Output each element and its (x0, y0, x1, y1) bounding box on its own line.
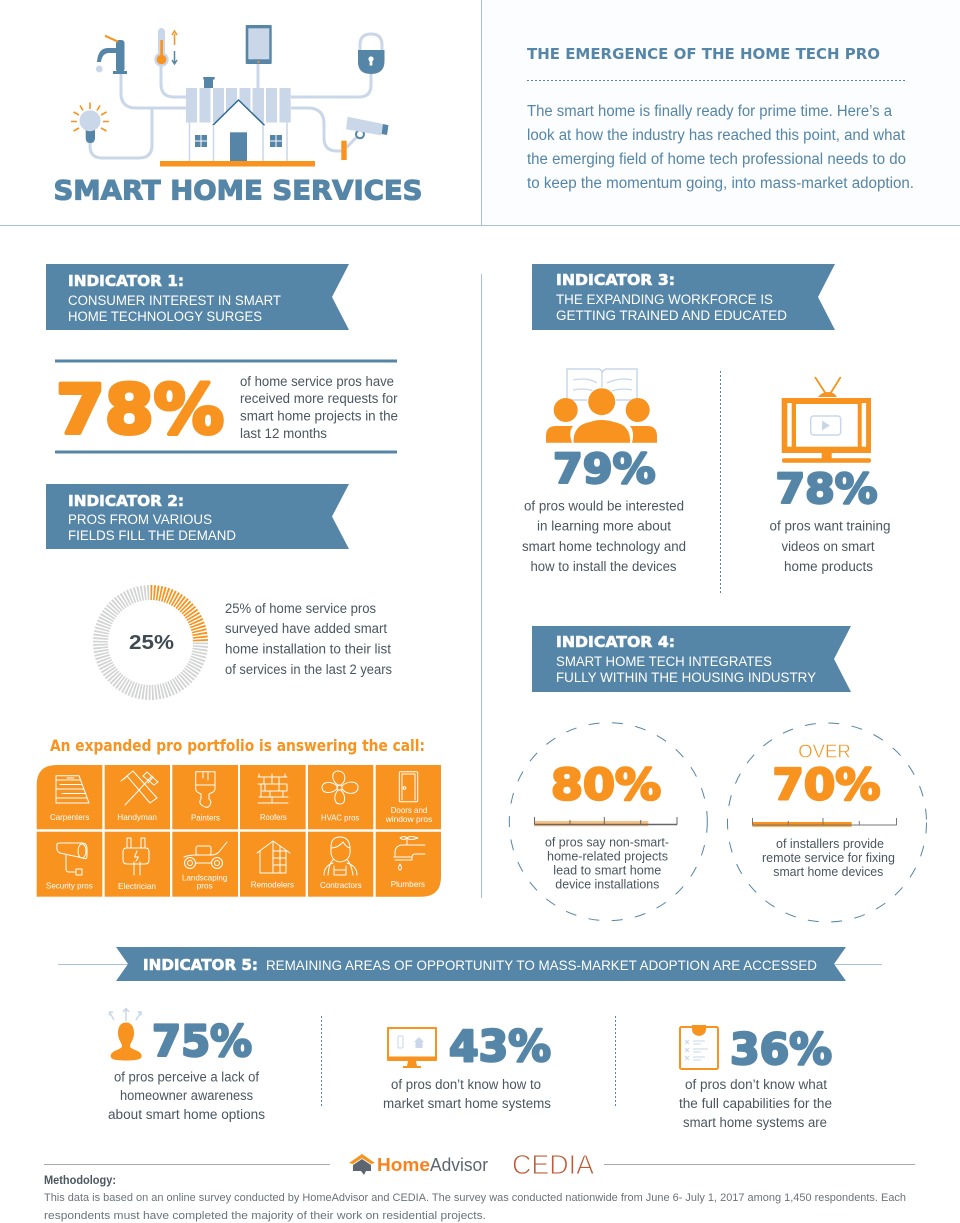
stat circle: over 70 percent (728, 723, 926, 922)
icon: mower (184, 842, 227, 868)
icon: remodelers (257, 841, 290, 873)
stat circle: 80 percent: device installations (555, 878, 659, 892)
donut description: home installation to their list (225, 642, 391, 656)
portfolio grid (37, 765, 441, 897)
icon: book and people (546, 369, 657, 443)
icon: thermometer (154, 28, 177, 67)
icon: person with arrows (110, 1008, 142, 1060)
stat circle: over 70 percent: of installers provide (776, 837, 884, 851)
intro text: look at how the industry has reached this point, and what (527, 127, 906, 144)
banner: indicator 4: INDICATOR 4: (556, 633, 675, 651)
stat: 78 percent requests (55, 361, 398, 452)
donut description: surveyed have added smart (225, 621, 387, 636)
label: hvac: HVAC pros (321, 812, 359, 822)
stat: 79 percent learning: smart home technology and (522, 539, 686, 554)
stat circle: over 70 percent: OVER (798, 742, 851, 762)
stat: 78 percent training videos: videos on smart (782, 539, 875, 554)
banner: indicator 3 (532, 264, 835, 330)
icon: hvac fan (322, 771, 358, 804)
icon: roofers (258, 774, 288, 803)
stat: 36 percent capabilities (679, 1025, 832, 1130)
banner: indicator 5: REMAINING AREAS OF OPPORTUNITY TO MASS-MARKET ADOPTION ARE ACCESSED (266, 958, 817, 973)
stat circle: 80 percent: home-related projects (547, 850, 668, 864)
banner: indicator 5: INDICATOR 5: (143, 956, 258, 974)
banner: indicator 3: GETTING TRAINED AND EDUCATED (556, 308, 787, 323)
label: window pros: window pros (385, 814, 432, 824)
banner: indicator 2: FIELDS FILL THE DEMAND (68, 528, 236, 543)
label: plumbers: Plumbers (391, 879, 425, 889)
methodology: This data is based on an online survey conducted by HomeAdvisor and CEDIA. The survey was conducted nationwide from June 6- July 1, 2017 among 1,450 respondents. Each (44, 1192, 906, 1204)
label: landscaping: Landscaping (182, 873, 228, 883)
stat circle: 80 percent: lead to smart home (553, 864, 661, 878)
illustration: connected smart home (71, 25, 388, 166)
stat: 78 percent training videos: of pros want training (770, 518, 890, 534)
banner: indicator 1 (46, 264, 349, 330)
stat: 79 percent learning (522, 369, 686, 574)
icon: handyman (121, 771, 158, 805)
label: doors: Doors and (391, 805, 428, 815)
label: landscaping pros: pros (197, 881, 213, 891)
methodology (44, 1175, 906, 1222)
icon: electrician (123, 838, 149, 875)
stat: 78 percent requests: smart home projects in the (240, 408, 398, 424)
stat: 78 percent training videos: home products (784, 559, 873, 574)
intro text: to keep the momentum going, into mass-market adoption. (527, 175, 914, 192)
stat: 43 percent marketing: market smart home systems (383, 1096, 551, 1111)
icon: padlock (358, 34, 384, 74)
icon: faucet (96, 36, 127, 74)
icon: door (399, 772, 418, 802)
stat circle: over 70 percent: smart home devices (773, 865, 883, 879)
donut description: of services in the last 2 years (225, 662, 392, 677)
intro text: The smart home is finally ready for prime time. Here’s a (527, 103, 892, 120)
banner: indicator 2 (46, 484, 349, 549)
banner: indicator 3: INDICATOR 3: (556, 271, 675, 289)
label: painters: Painters (191, 813, 220, 823)
stat: 43 percent marketing: 43% (449, 1022, 551, 1072)
progress bar (752, 818, 897, 827)
stat: 79 percent learning: how to install the devices (530, 559, 677, 574)
intro text (527, 103, 914, 192)
stat: 36 percent capabilities: the full capabilities for the (679, 1096, 832, 1111)
icon: contractors (324, 837, 357, 875)
stat: 75 percent awareness: 75% (152, 1017, 252, 1067)
label: contractors: Contractors (320, 880, 362, 890)
stat: 78 percent requests: received more requests for (240, 391, 398, 406)
banner: indicator 2: INDICATOR 2: (68, 492, 184, 510)
stat circle: 80 percent: 80% (551, 760, 661, 810)
logo: CEDIA: CEDIA (512, 1149, 595, 1180)
label: carpenters: Carpenters (50, 812, 89, 822)
banner: indicator 4: SMART HOME TECH INTEGRATES (556, 654, 772, 669)
stat: 43 percent marketing (383, 1022, 551, 1111)
stat: 78 percent training videos: 78% (776, 465, 878, 513)
progress bar (534, 817, 677, 826)
logo: HomeAdvisor: Home (377, 1155, 430, 1175)
stat: 75 percent awareness (108, 1008, 265, 1122)
label: handyman: Handyman (117, 812, 157, 822)
stat circle: over 70 percent: 70% (772, 760, 880, 810)
stat: 75 percent awareness: homeowner awareness (120, 1088, 253, 1103)
donut chart: 25 percent (100, 592, 200, 692)
methodology: Methodology: (44, 1175, 116, 1187)
banner: indicator 1: CONSUMER INTEREST IN SMART (68, 293, 281, 308)
icon: carpenters (56, 776, 89, 803)
label: remodelers: Remodelers (251, 880, 294, 890)
icon: monitor (387, 1027, 437, 1068)
label: security: Security pros (46, 880, 93, 890)
stat: 43 percent marketing: of pros don’t know how to (391, 1077, 541, 1092)
portfolio heading: An expanded pro portfolio is answering the call: (50, 736, 425, 755)
stat circle: 80 percent (509, 723, 707, 921)
donut description (225, 601, 392, 677)
banner: indicator 1: INDICATOR 1: (68, 272, 184, 290)
banner: indicator 3: THE EXPANDING WORKFORCE IS (556, 292, 773, 307)
icon: television (782, 377, 871, 463)
title: SMART HOME SERVICES (54, 176, 422, 206)
stat: 78 percent requests: last 12 months (240, 426, 327, 441)
banner: indicator 4 (532, 626, 851, 692)
intro panel (527, 45, 914, 192)
banner: indicator 2: PROS FROM VARIOUS (68, 512, 212, 527)
icon: clipboard (680, 1025, 718, 1069)
stat: 75 percent awareness: about smart home options (108, 1107, 265, 1122)
stat: 79 percent learning: 79% (553, 445, 656, 493)
logo: HomeAdvisor: Advisor (430, 1155, 488, 1175)
label: roofers: Roofers (260, 812, 287, 822)
methodology: respondents must have completed the majority of their work on residential projects. (44, 1210, 486, 1222)
stat: 75 percent awareness: of pros perceive a lack of (114, 1070, 259, 1084)
icon: tablet (246, 25, 272, 64)
stat: 36 percent capabilities: smart home systems are (683, 1115, 827, 1130)
intro text: the emerging field of home tech professional needs to do (527, 151, 906, 168)
stat: 36 percent capabilities: 36% (730, 1025, 832, 1075)
icon: security camera (341, 117, 388, 160)
stat circle: 80 percent: of pros say non-smart- (545, 836, 669, 850)
icon: house (160, 77, 315, 166)
banner: indicator 1: HOME TECHNOLOGY SURGES (68, 309, 262, 324)
icon: light bulb (71, 102, 109, 143)
stat: 79 percent learning: of pros would be interested (524, 498, 684, 514)
donut description: 25% of home service pros (225, 601, 376, 616)
stat: 78 percent training videos (770, 377, 890, 574)
stat circle: over 70 percent: remote service for fixing (762, 851, 895, 865)
icon: painters (196, 772, 215, 807)
banner: indicator 5 (116, 947, 846, 981)
stat: 79 percent learning: in learning more about (537, 518, 671, 534)
stat: 78 percent requests: of home service pros have (240, 374, 394, 389)
icon: plumbers (394, 836, 425, 870)
intro heading: THE EMERGENCE OF THE HOME TECH PRO (527, 45, 880, 63)
logo: HomeAdvisor (349, 1154, 488, 1175)
stat: 78 percent requests: 78% (56, 371, 224, 450)
stat: 36 percent capabilities: of pros don’t know what (685, 1077, 827, 1092)
donut chart: 25 percent: 25% (129, 632, 174, 654)
icon: security (57, 843, 87, 875)
banner: indicator 4: FULLY WITHIN THE HOUSING INDUSTRY (556, 670, 816, 685)
label: electrician: Electrician (118, 881, 156, 891)
